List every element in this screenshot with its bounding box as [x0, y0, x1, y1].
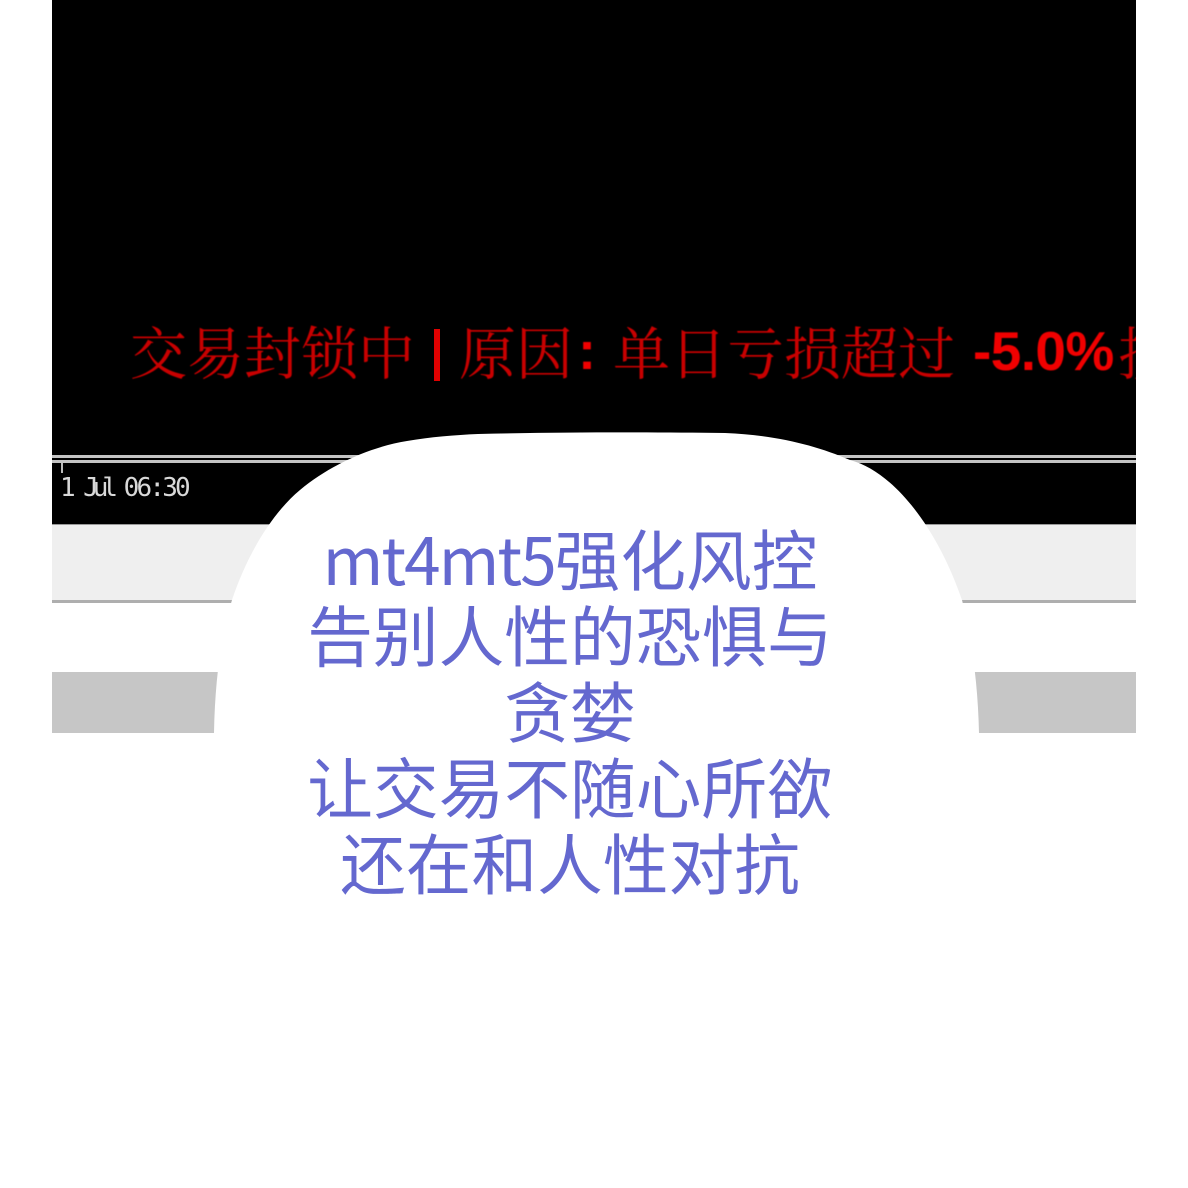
warning colon: : — [578, 321, 596, 381]
chart axis lower line — [52, 460, 1136, 463]
axis date label: 1 Jul 06:30 — [60, 473, 188, 503]
warning separator — [434, 329, 440, 381]
headline text: 告别人性的恐惧与 — [307, 585, 833, 680]
warning text: trading locked — [130, 309, 1136, 391]
panel: trading platform screenshot — [52, 0, 1136, 733]
panel: light grey toolbar band — [52, 524, 1136, 603]
warning part: locked: 交易封锁中 — [130, 309, 415, 391]
chart axis upper line — [52, 455, 1136, 458]
headline text: 贪婪 — [504, 661, 636, 756]
axis tick — [61, 463, 63, 473]
warning number: -5.0% — [973, 320, 1114, 382]
panel: black chart area — [52, 0, 1136, 524]
headline text: 还在和人性对抗 — [340, 813, 800, 908]
panel: grey bottom band — [52, 672, 1136, 733]
headline text: 让交易不随心所欲 — [307, 737, 833, 832]
warning part: daily loss exceeds: 单日亏损超过 — [613, 309, 955, 391]
headline text — [307, 509, 833, 908]
warning part: reason: 原因 — [459, 309, 573, 391]
headline text: mt4mt5强化风控 — [323, 509, 817, 604]
